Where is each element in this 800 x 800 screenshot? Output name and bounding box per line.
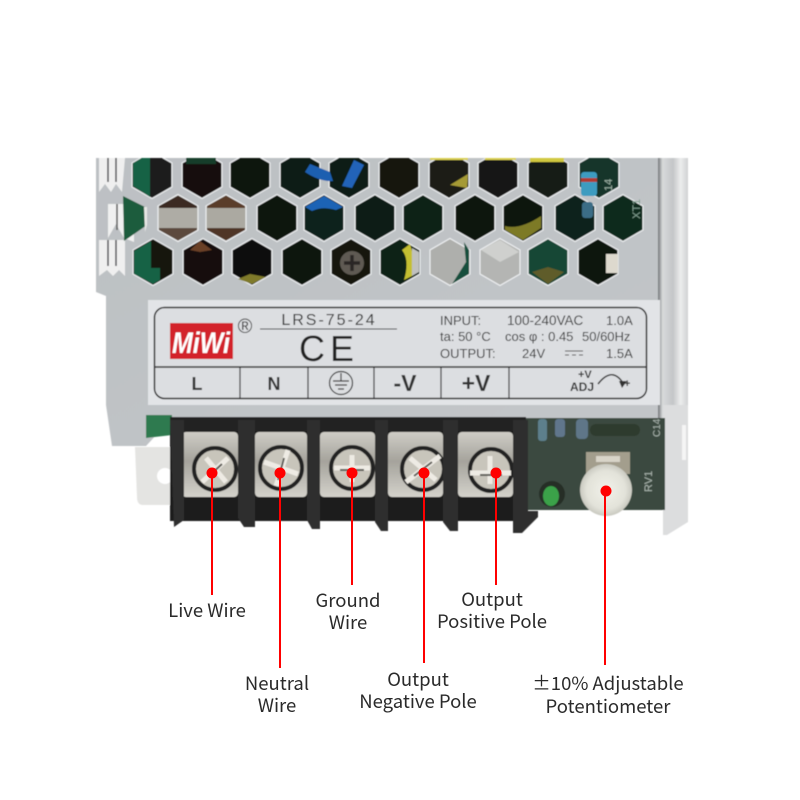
left partial slots <box>99 158 147 276</box>
logo: MiWi: MiWi <box>172 327 231 360</box>
specifications: 1.0A <box>606 313 633 328</box>
chassis plate <box>96 158 660 446</box>
hexagon cut-outs: bottom row <box>133 238 618 286</box>
pointer: neutral wire <box>274 468 286 668</box>
specifications: cos φ : 0.45 <box>505 329 573 344</box>
board markings: C14 <box>652 418 663 437</box>
specifications: 24V <box>522 346 545 361</box>
specifications: INPUT: <box>440 313 481 328</box>
caption: neutral wire: Neutral <box>245 670 309 696</box>
specifications: 100-240VAC <box>507 313 584 328</box>
model number: LRS-75-24 <box>281 312 377 329</box>
caption: adjustable potentiometer: ±10% Adjustable <box>532 670 684 696</box>
pointer: live wire <box>206 468 218 595</box>
caption: output negative pole: Negative Pole <box>359 688 477 714</box>
caption: output positive pole: Output <box>461 586 523 612</box>
hexagon cut-outs: top row: 14 <box>603 179 615 191</box>
hexagon cut-outs: top row <box>99 152 619 276</box>
potentiometer <box>580 452 632 516</box>
control board: RV1 <box>643 471 655 492</box>
caption: adjustable potentiometer: Potentiometer <box>546 693 671 719</box>
terminal markings: -V <box>394 370 417 396</box>
terminal markings: L <box>192 374 202 394</box>
specifications <box>440 313 633 361</box>
device label plate <box>148 300 660 405</box>
caption: ground wire: Ground <box>316 587 380 613</box>
specifications: 50/60Hz <box>582 329 630 344</box>
pointer: ground wire <box>346 468 358 585</box>
pointer: output positive pole <box>490 468 502 585</box>
specifications: OUTPUT: <box>440 346 496 361</box>
pointer: potentiometer <box>600 486 612 665</box>
block dividers <box>170 420 538 533</box>
green LED <box>539 481 565 507</box>
registered mark: ® <box>238 316 253 338</box>
terminal markings: N <box>268 374 280 394</box>
adjust marking: + <box>624 378 630 390</box>
hexagon cut-outs: middle row <box>158 194 643 242</box>
specifications: ta: 50 °C <box>440 329 491 344</box>
terminal markings: +V <box>462 370 491 396</box>
caption: output negative pole: Output <box>387 666 449 692</box>
terminal markings <box>192 370 491 396</box>
pointer: output negative pole <box>418 468 430 663</box>
terminal screws <box>182 432 513 497</box>
adjust marking: ADJ <box>570 380 594 394</box>
specifications: 1.5A <box>606 346 633 361</box>
CE mark: CE <box>299 328 359 369</box>
caption: output positive pole: Positive Pole <box>437 608 547 634</box>
caption: live wire: Live Wire <box>168 597 246 623</box>
right side flange <box>658 158 688 535</box>
adjust marking: +V <box>578 369 592 381</box>
caption: neutral wire: Wire <box>258 692 296 718</box>
caption: ground wire: Wire <box>329 609 367 635</box>
control board <box>525 418 665 516</box>
terminal block <box>170 417 538 533</box>
adjust marking <box>570 369 630 394</box>
hexagon cut-outs: middle row: XT1 <box>631 199 643 219</box>
mounting tab <box>135 447 172 505</box>
power supply photo <box>96 152 688 535</box>
